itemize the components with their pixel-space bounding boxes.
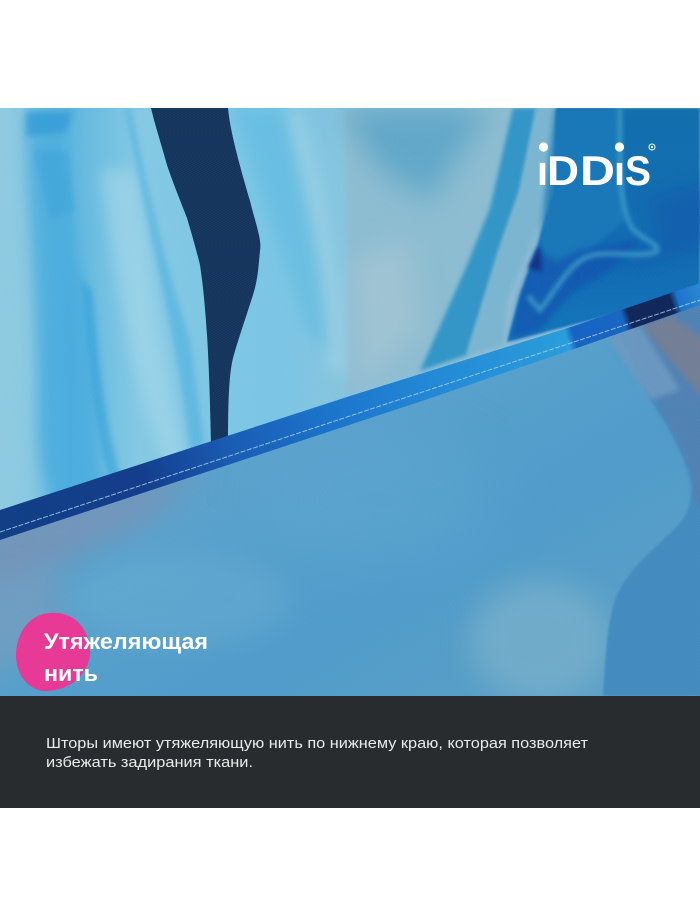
swirl highlight (528, 108, 657, 310)
upper curtain panel with marble pattern (0, 108, 700, 528)
heading (44, 629, 208, 686)
right shaded fold (602, 400, 700, 696)
grey-blue wedge (347, 113, 405, 392)
teal band (420, 108, 537, 371)
registered mark (649, 144, 655, 150)
pink blob accent (16, 613, 90, 691)
dark caption band (0, 696, 700, 808)
logo letter D: D (580, 147, 615, 194)
caption line 1: Шторы имеют утяжеляющую нить по нижнему краю, которая позволяет (46, 735, 588, 752)
dark navy stripe (151, 108, 260, 445)
heading line 2: нить (44, 661, 98, 686)
photo: shower curtain fabric (0, 108, 700, 700)
deep blue swirl field (507, 108, 700, 342)
logo letter i: ı (537, 147, 548, 194)
logo letter i: ı (614, 147, 625, 194)
heading line 1: Утяжеляющая (44, 629, 208, 654)
lower curtain panel (0, 280, 700, 700)
hem with weighted thread (0, 283, 700, 540)
pale band (467, 108, 560, 355)
caption line 2: избежать задирания ткани. (46, 754, 253, 771)
logo: IDDIS (537, 142, 655, 194)
logo dots (539, 142, 624, 152)
caption text (46, 735, 588, 771)
logo letter S: S (625, 147, 651, 194)
stitching line (0, 300, 700, 532)
logo letter D: D (547, 147, 579, 194)
